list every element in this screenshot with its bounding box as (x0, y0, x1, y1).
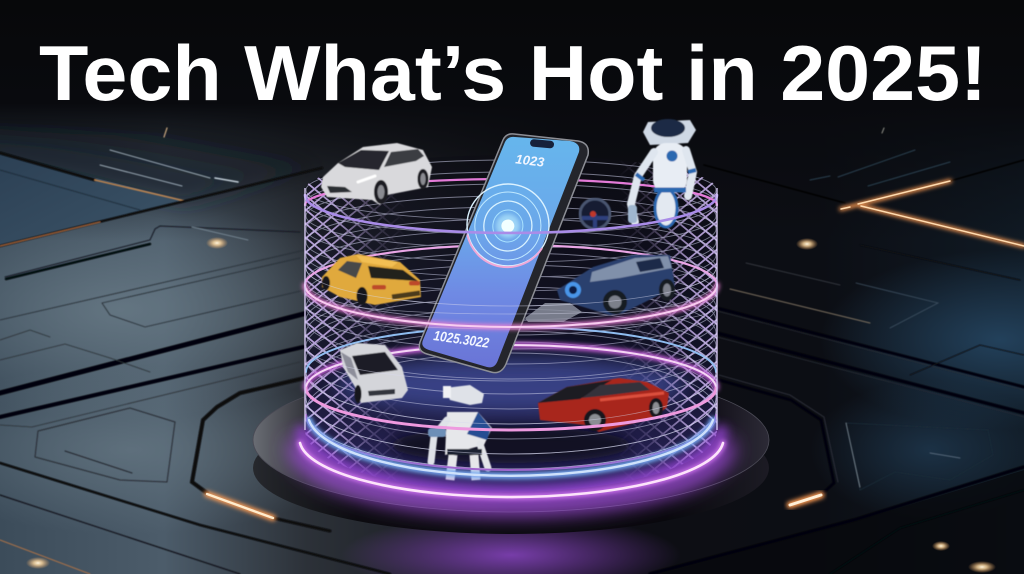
phone top date: 1023 (515, 151, 546, 170)
phone screen (422, 137, 579, 367)
cylinder interior (305, 155, 717, 492)
floor seams and panel lines, left (0, 128, 390, 574)
glowing rings front halves (298, 195, 725, 506)
floor indicator lights (26, 237, 996, 573)
orange light strips (207, 181, 1024, 518)
phone (419, 134, 588, 373)
glowing rings back halves (305, 179, 717, 388)
icon: yellow car (322, 254, 421, 305)
phone metal frame (419, 134, 588, 373)
phone radar rings (462, 179, 554, 272)
cylinder outer edges (305, 188, 717, 430)
icon: robot top right (628, 119, 696, 227)
phone notch (530, 139, 554, 149)
icon: small grey car under blue car (525, 303, 582, 322)
hologram lattice wall (305, 155, 717, 492)
floor seams and panel lines, right (650, 128, 1024, 574)
icon: white car bottom left (340, 343, 408, 403)
icon: robot bottom (428, 385, 492, 480)
title: Tech What’s Hot in 2025! (39, 29, 987, 117)
icon: red car (538, 378, 669, 432)
hologram thin rings front of objects (306, 268, 716, 469)
pedestal disk (253, 368, 769, 534)
icon: steering wheel (580, 199, 610, 229)
hologram thin rings behind objects (306, 160, 716, 469)
icon: blue car (557, 255, 675, 315)
icon: white car top left (321, 143, 432, 205)
phone bottom date: 1025.3022 (433, 327, 490, 351)
